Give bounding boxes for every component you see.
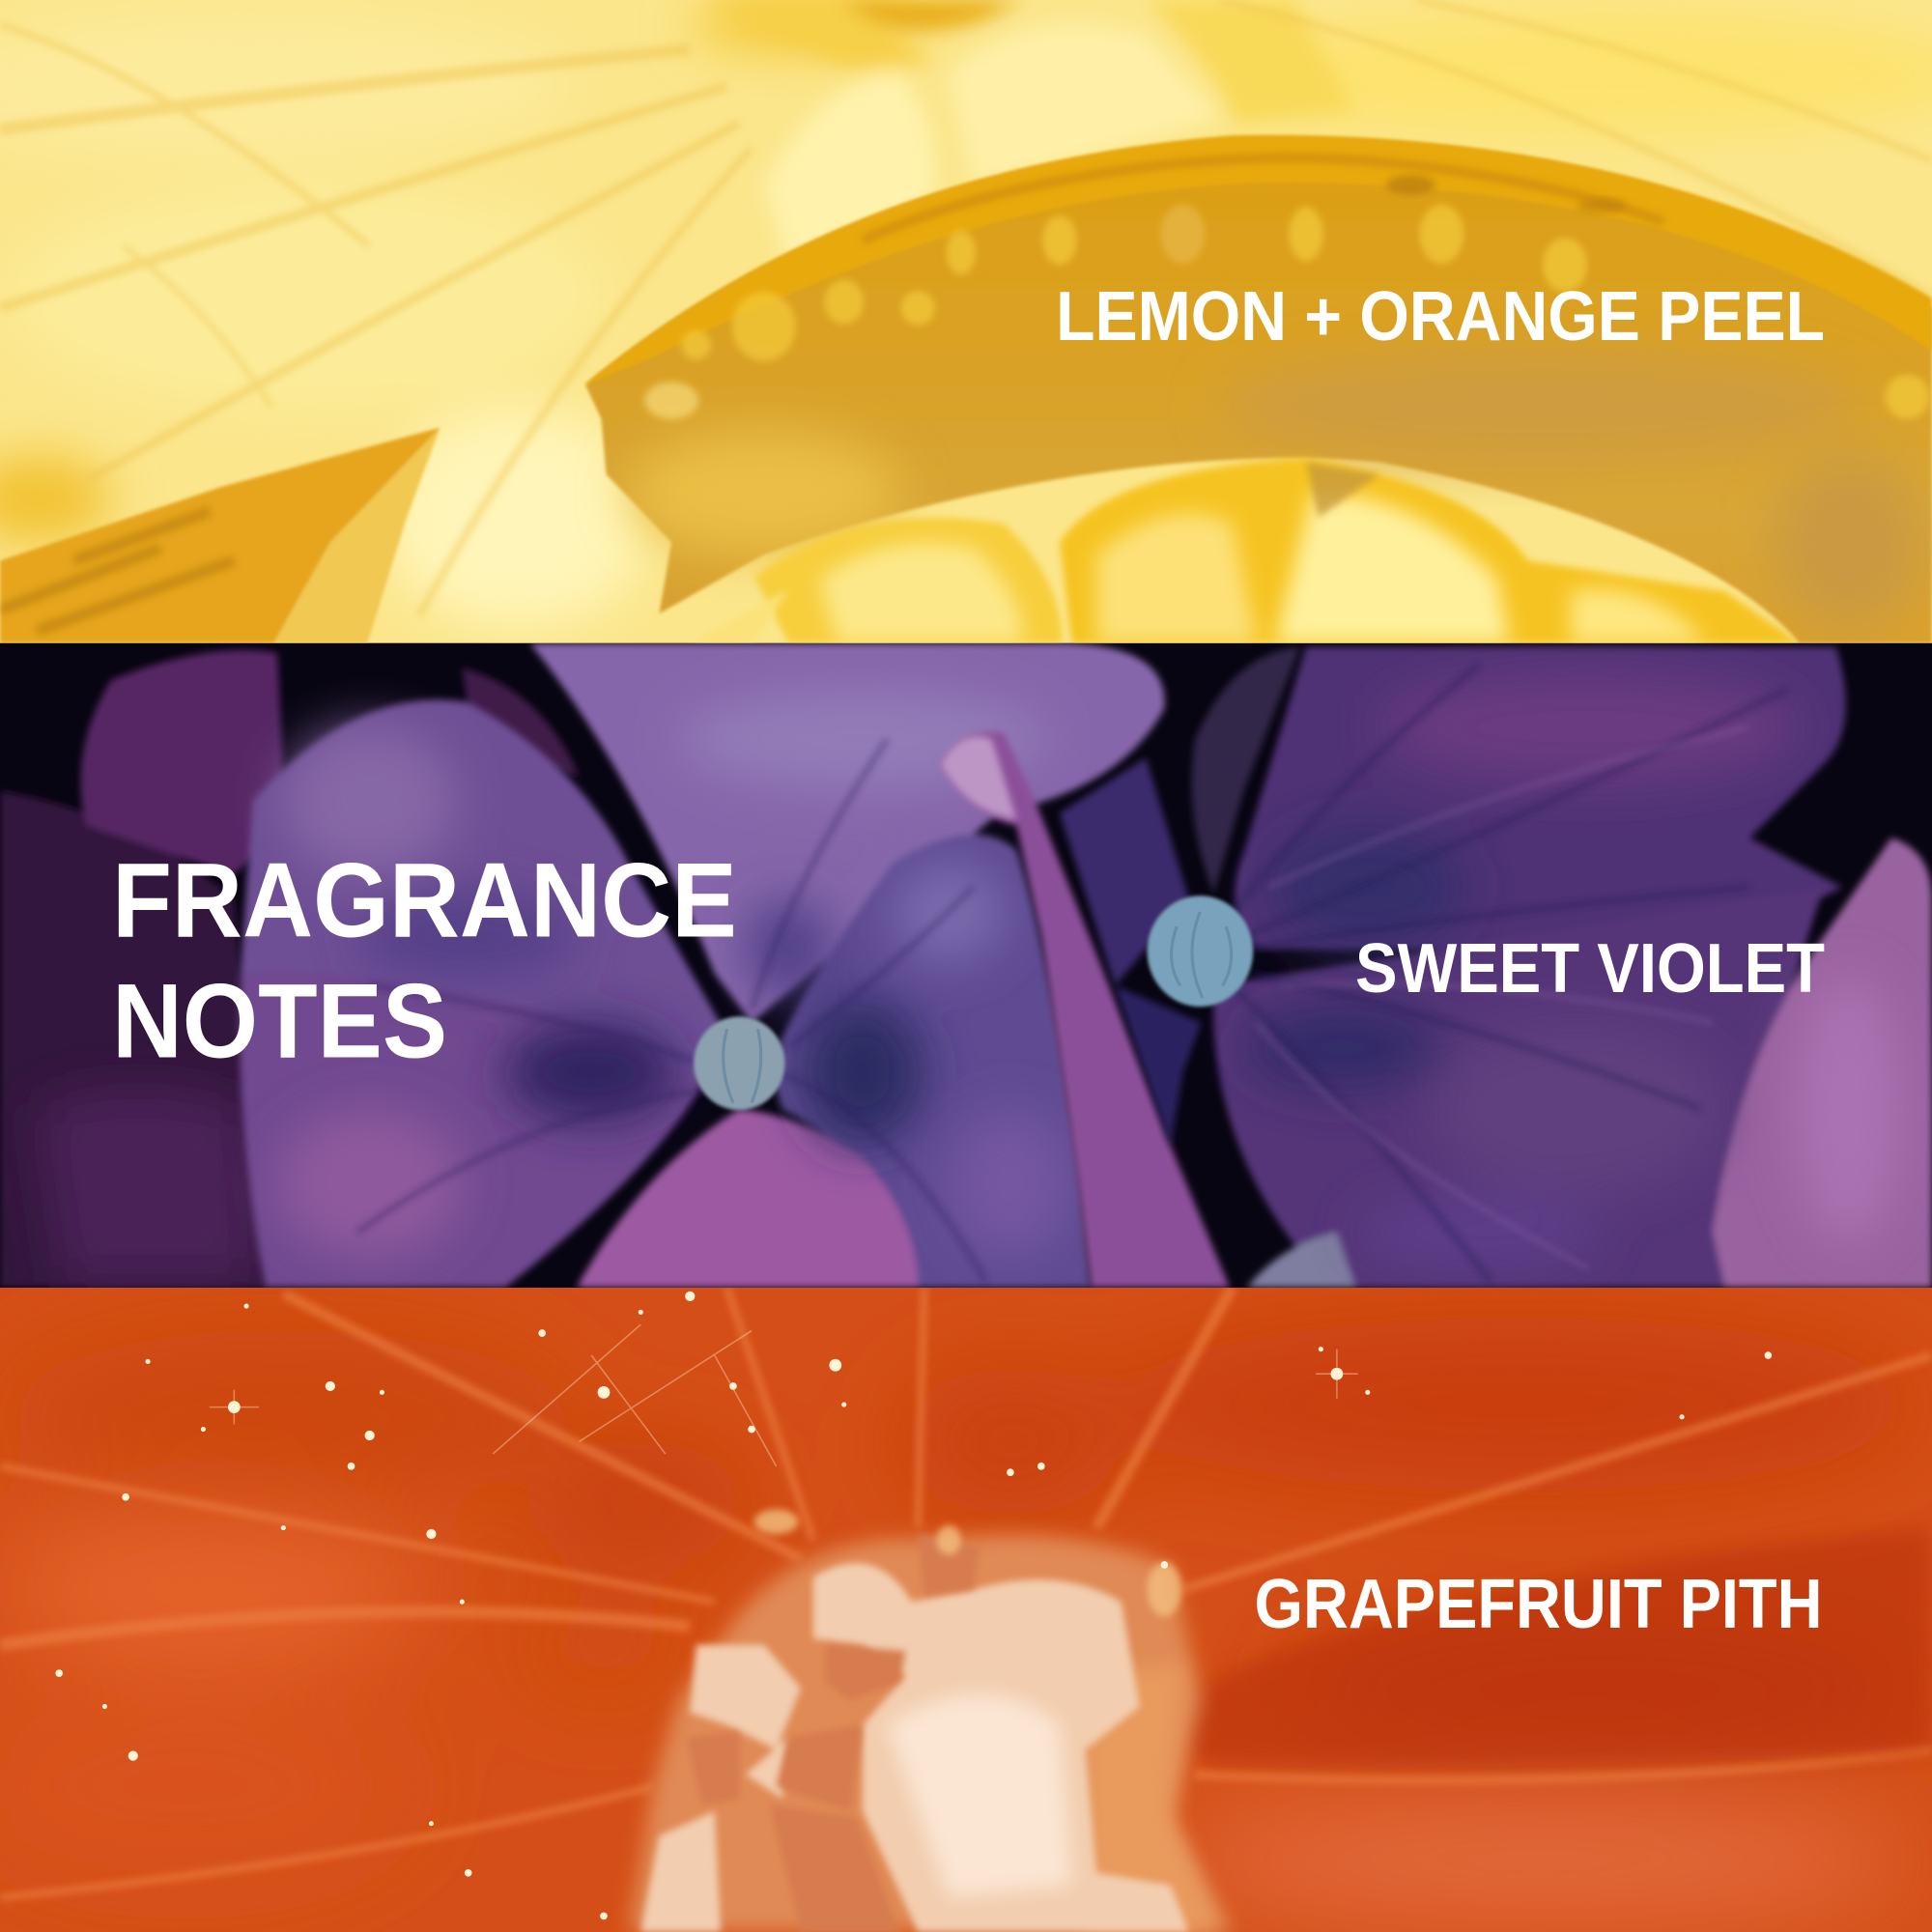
- lower-left peel wedge: [0, 428, 440, 643]
- label: grapefruit pith: GRAPEFRUIT PITH: [1254, 1565, 1822, 1643]
- inner fruit segments: [690, 458, 1799, 643]
- central pith: [629, 1509, 1233, 1932]
- far-left dark petals: [0, 650, 579, 1288]
- label: sweet violet: SWEET VIOLET: [1355, 929, 1825, 1008]
- right flower petals: [1060, 647, 1932, 1288]
- dark wedge: [1175, 1528, 1932, 1767]
- sparkles: [55, 1292, 1772, 1919]
- membrane rays: [0, 1288, 1932, 1897]
- panel: lemon and orange peel photo: [0, 0, 1932, 643]
- left flower veins: [357, 739, 985, 1282]
- rind: [585, 135, 1932, 384]
- segment veins: [0, 0, 1932, 616]
- panel: sweet violet photo: [0, 643, 1932, 1288]
- panel: grapefruit pith photo: [0, 1288, 1932, 1932]
- right flower veins: [1233, 666, 1786, 1282]
- flower stamens: [694, 1016, 784, 1110]
- heading: fragrance notes: NOTES: [112, 962, 447, 1080]
- peel pulp vesicles: [644, 205, 1929, 419]
- left flower petals: [240, 643, 1165, 1288]
- heading: fragrance notes: [112, 841, 737, 1080]
- heading: fragrance notes: FRAGRANCE: [112, 841, 737, 959]
- centre petal ribbon: [940, 732, 1230, 1288]
- peel arc: [585, 135, 1932, 643]
- label: lemon + orange peel: LEMON + ORANGE PEEL: [1056, 277, 1825, 355]
